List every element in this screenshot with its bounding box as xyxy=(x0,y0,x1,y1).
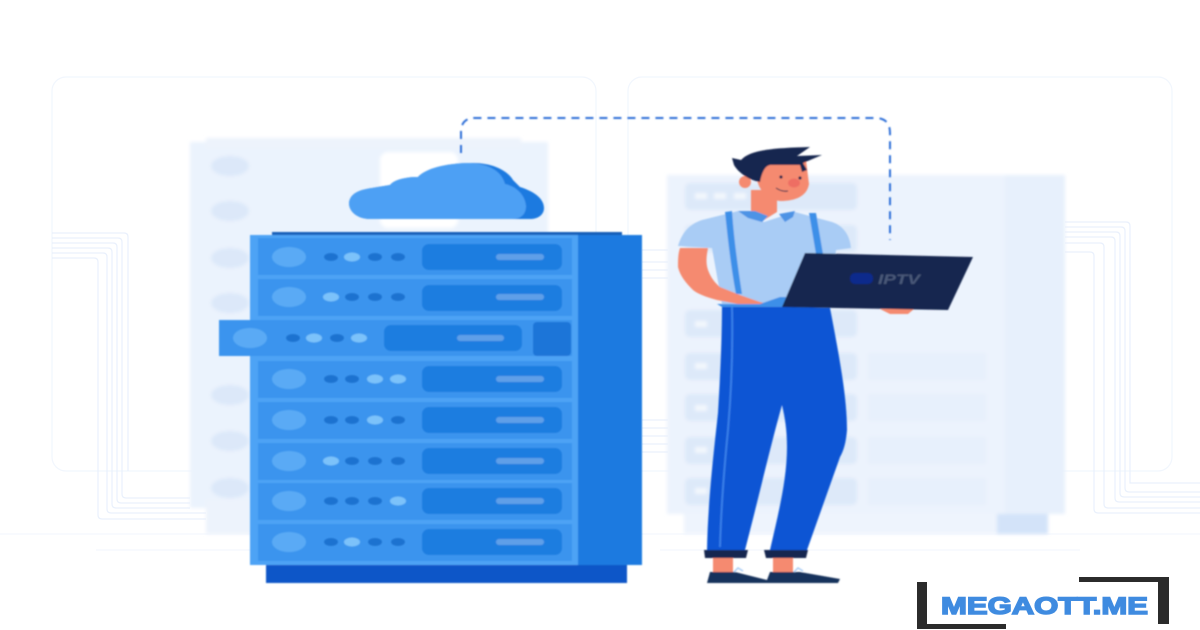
row panels xyxy=(422,244,562,555)
trousers xyxy=(707,305,847,550)
server rows xyxy=(258,238,572,561)
shoes xyxy=(707,572,840,583)
left background server xyxy=(190,138,548,534)
rack top and base xyxy=(272,232,622,236)
suspenders xyxy=(725,211,823,294)
small cable marks xyxy=(238,388,240,443)
laptop xyxy=(782,253,809,307)
belt xyxy=(717,297,786,307)
shirt xyxy=(678,211,851,304)
logo brackets xyxy=(917,577,1169,629)
ankles xyxy=(713,558,793,573)
right background server xyxy=(667,175,1065,534)
arm xyxy=(678,248,772,305)
laptop logo xyxy=(850,271,922,287)
hair xyxy=(732,147,822,182)
dashed connection line xyxy=(461,118,890,240)
logo text: MEGAOTT.ME xyxy=(941,593,1148,620)
row status lights xyxy=(272,247,306,552)
person xyxy=(678,147,973,583)
main server rack xyxy=(219,232,642,583)
face xyxy=(757,160,809,201)
collar xyxy=(738,211,795,222)
cuffs xyxy=(704,550,808,558)
hand under laptop xyxy=(880,309,914,314)
cloud xyxy=(349,163,544,219)
laptop logo: IPTV xyxy=(878,271,922,287)
pulled-out drawer xyxy=(219,320,572,356)
light dots xyxy=(323,252,406,546)
dark dots xyxy=(324,253,405,546)
brand logo xyxy=(917,577,1169,629)
background panels and wires xyxy=(0,77,1200,550)
neck xyxy=(751,190,777,220)
